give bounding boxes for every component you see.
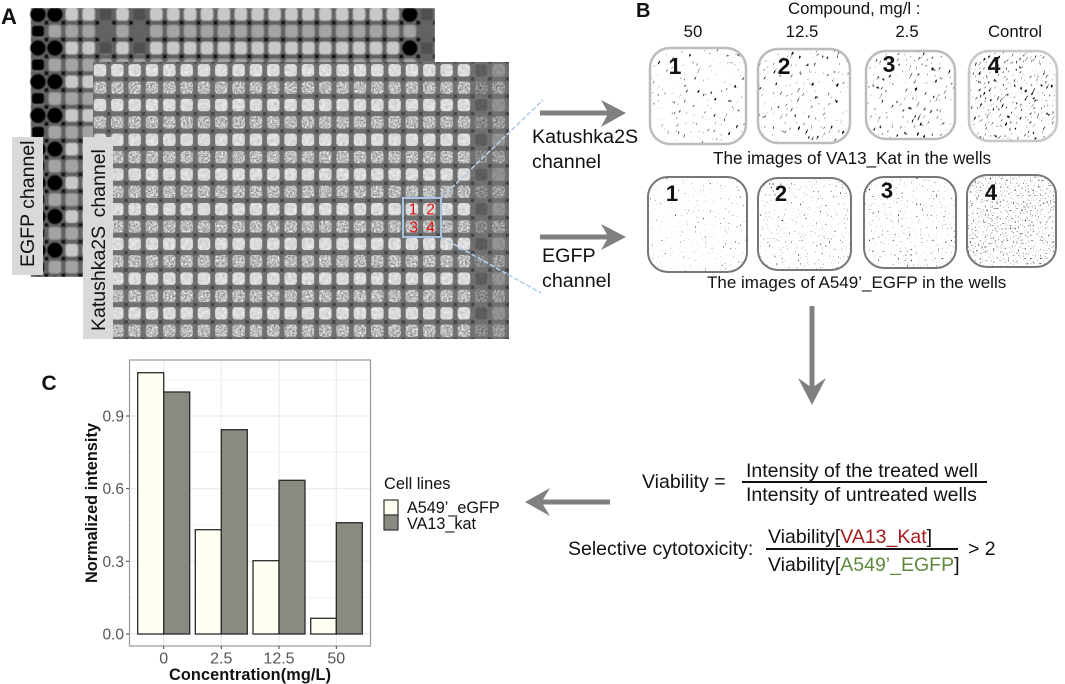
y tick labels: 0.6: [102, 481, 124, 498]
concentration headers: 50: [684, 22, 702, 41]
EGFP channel plate image: [30, 8, 435, 277]
well row: VA13_Kat: [648, 46, 1058, 146]
well row: VA13_Kat: 4: [988, 52, 1001, 78]
viability formula: Intensity of the treated well: [746, 460, 978, 482]
y tick labels: 0.9: [102, 408, 124, 426]
panel letter B: B: [636, 0, 650, 22]
arrow: EGFP channel to wells: [540, 224, 626, 250]
x tick labels: 2.5: [210, 650, 233, 668]
well row: A549'_EGFP: 3: [881, 178, 893, 203]
caption: A549'_EGFP: The images of A549’_EGFP in the wells: [707, 273, 1006, 292]
highlighted four wells: 2: [426, 202, 435, 218]
well row: VA13_Kat: 3: [883, 51, 895, 77]
concentration headers: 12.5: [786, 22, 818, 41]
EGFP channel label: [12, 137, 43, 275]
caption: VA13_Kat: The images of VA13_Kat in the wells: [713, 149, 991, 168]
highlighted four wells: 3: [409, 220, 418, 236]
arrow: Katushka2S channel to wells: [540, 100, 626, 127]
plot border: [130, 360, 370, 646]
well row: A549'_EGFP: 1: [666, 181, 678, 206]
legend: A549’_eGFP: [407, 499, 500, 517]
EGFP channel label: EGFP channel: [17, 141, 39, 267]
label: Katushka2S channel: Katushka2S: [532, 126, 638, 148]
well row: A549'_EGFP: 4: [985, 180, 998, 205]
label: EGFP channel: channel: [542, 270, 611, 292]
y tick labels: [102, 408, 124, 644]
panel B: well images: [647, 2, 1058, 292]
axis ticks: [126, 416, 336, 649]
selective cytotoxicity formula: > 2: [968, 538, 996, 560]
legend: [384, 475, 500, 533]
y tick labels: 0.3: [102, 554, 124, 571]
Katushka2S channel label: Katushka2S channel: [88, 149, 110, 331]
plot area and grid: [130, 360, 370, 646]
x tick labels: 50: [327, 650, 345, 668]
well row: A549'_EGFP: [648, 175, 1056, 272]
x tick labels: 12.5: [263, 650, 295, 668]
selective cytotoxicity formula: Selective cytotoxicity:: [568, 538, 753, 560]
well row: VA13_Kat: 2: [778, 53, 790, 79]
x tick labels: 0: [159, 650, 168, 668]
concentration headers: 2.5: [895, 22, 919, 41]
concentration headers: [684, 22, 1042, 41]
bars: [138, 373, 362, 634]
highlighted four wells: 1: [409, 202, 417, 218]
viability formula: Intensity of untreated wells: [746, 484, 977, 506]
x tick labels: [159, 650, 345, 668]
well row: A549'_EGFP: 2: [775, 181, 787, 206]
panel A: plate images: [12, 8, 543, 339]
y tick labels: 0.0: [102, 626, 124, 644]
label: Katushka2S channel: channel: [532, 151, 601, 173]
Katushka2S channel plate image: [93, 62, 509, 339]
label: EGFP channel: EGFP: [542, 245, 596, 267]
viability formula: Viability =: [642, 471, 726, 493]
selective cytotoxicity formula: Viability[VA13_Kat]: [768, 526, 932, 548]
selective cytotoxicity formula: Viability[A549’_EGFP]: [768, 554, 960, 576]
x axis title: Concentration(mg/L): [169, 666, 331, 684]
arrow: down to viability formula: [798, 306, 826, 405]
legend: Cell lines: [384, 475, 450, 493]
viability formula: [642, 460, 987, 506]
panel C: bar chart: [83, 360, 500, 684]
highlighted four wells: 4: [426, 220, 435, 236]
legend: VA13_kat: [407, 515, 476, 533]
well row: VA13_Kat: 1: [669, 53, 682, 79]
arrow: left to bar chart: [525, 488, 610, 516]
concentration headers: Control: [988, 22, 1042, 41]
panel letter C: C: [42, 372, 57, 395]
selective cytotoxicity formula: [568, 526, 996, 576]
y axis title: Normalized intensity: [83, 423, 101, 583]
Katushka2S channel label: [83, 137, 113, 339]
panel letter A: A: [1, 4, 17, 29]
highlighted four wells: [403, 100, 543, 293]
